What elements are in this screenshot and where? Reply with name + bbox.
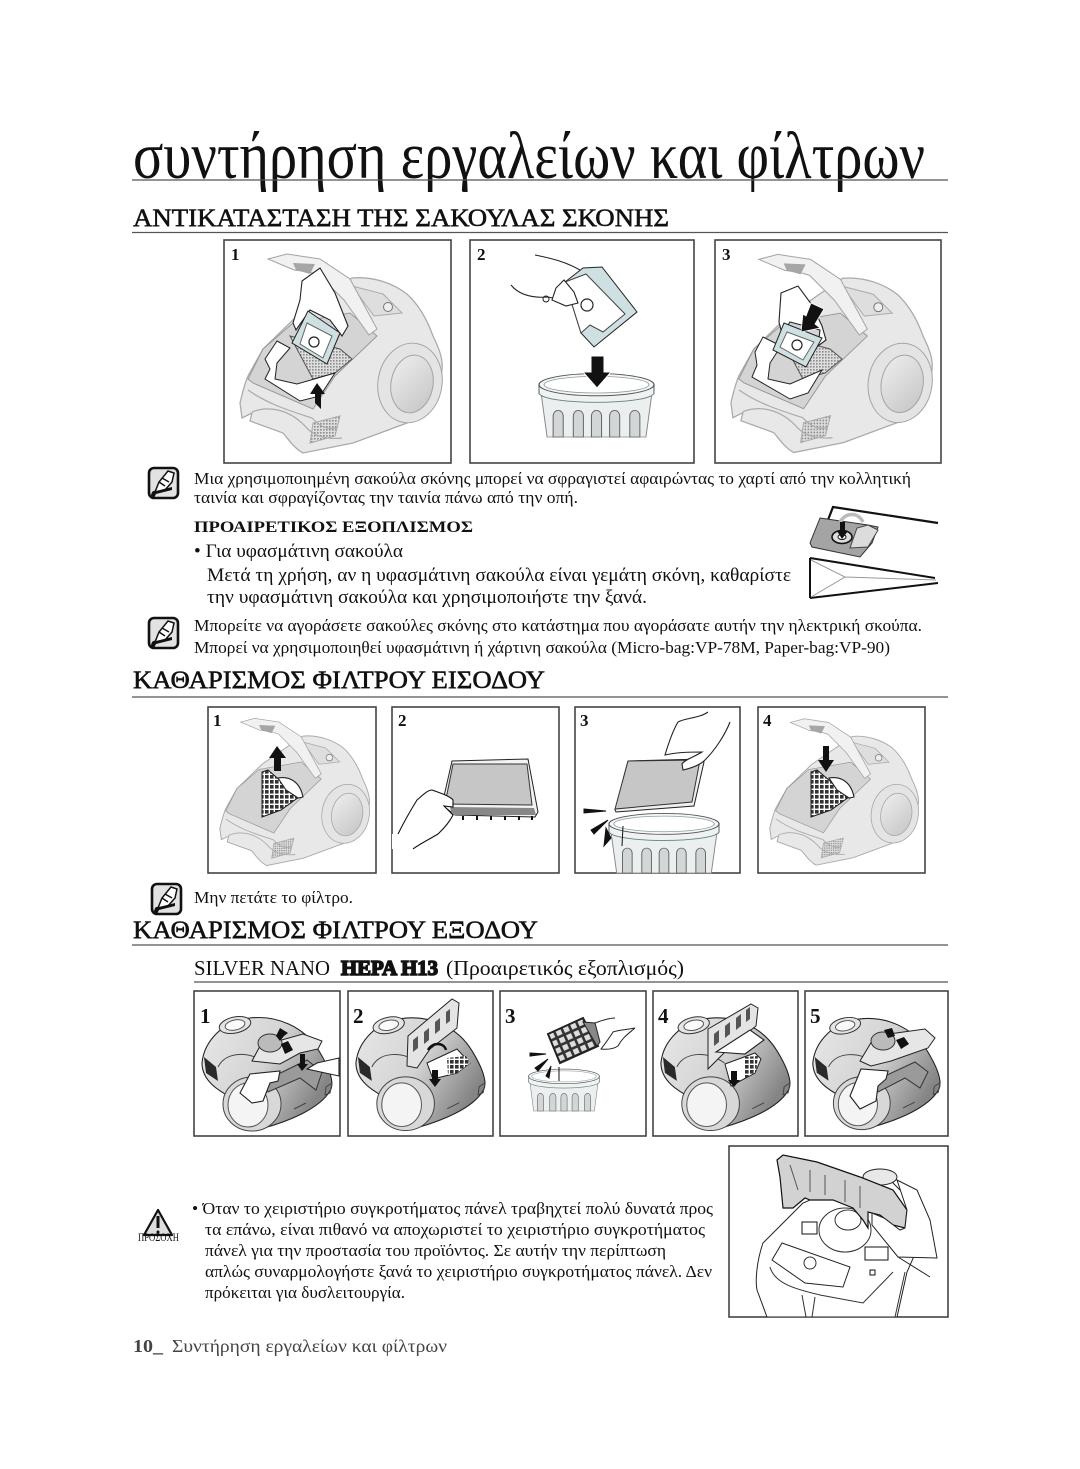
panel: inlet filter step 3: 3 <box>580 711 588 730</box>
panel: bag step 3: 3 <box>722 245 730 264</box>
text block: cloth bag: Μετά τη χρήση, αν η υφασμάτινη σακούλα είναι γεμάτη σκόνη, καθαρίστε <box>207 565 791 586</box>
panel: panel handle illustration <box>729 1146 948 1317</box>
panel: inlet filter step 4: 4 <box>763 711 772 730</box>
icon: caution <box>138 1210 179 1244</box>
icon: down arrow <box>583 356 611 388</box>
text block: do not discard the filter: Μην πετάτε το φίλτρο. <box>194 888 353 907</box>
panel: inlet filter step 1: 1 <box>213 711 222 730</box>
text block: caution: πρόκειται για δυσλειτουργία. <box>205 1283 405 1302</box>
panel: outlet filter step 4: 4 <box>658 1004 669 1028</box>
text block: note on buying bags: Μπορείτε να αγοράσετε σακούλες σκόνης στο κατάστημα που αγοράσατε αυτήν την ηλεκτρική σκούπα. <box>194 616 922 635</box>
text block: cloth bag: την υφασμάτινη σακούλα και χρησιμοποιήστε την ξανά. <box>207 587 647 608</box>
heading: outlet filter cleaning: ΚΑΘΑΡΙΣΜΟΣ ΦΙΛΤΡΟΥ ΕΞΟΔΟΥ <box>133 917 538 944</box>
heading: replacing the dust bag: ΑΝΤΙΚΑΤΑΣΤΑΣΗ ΤΗΣ ΣΑΚΟΥΛΑΣ ΣΚΟΝΗΣ <box>133 205 669 232</box>
panel: outlet filter step 3: 3 <box>505 1004 516 1028</box>
panel: bag step 3 <box>715 240 941 463</box>
subheading: silver nano hepa h13: (Προαιρετικός εξοπλισμός) <box>446 956 684 980</box>
panel: outlet filter step 2 <box>348 991 493 1136</box>
icon: note <box>152 884 181 914</box>
subheading: silver nano hepa h13: HEPA H13 <box>341 956 438 980</box>
panel: bag step 1 <box>224 240 451 463</box>
text block: note on sealing the bag: Μια χρησιμοποιημένη σακούλα σκόνης μπορεί να σφραγιστεί αφαιρώντας το χαρτί από την κολλητική <box>194 469 911 488</box>
icon: note <box>149 468 178 498</box>
subheading: silver nano hepa h13: SILVER NANO <box>194 956 330 980</box>
footer: 10_ <box>133 1336 164 1356</box>
panel: bag step 1: 1 <box>231 245 240 264</box>
text block: caution: απλώς συναρμολογήστε ξανά το χειριστήριο συγκροτήματος πάνελ. Δεν <box>205 1262 712 1281</box>
text block: note on buying bags <box>194 616 922 657</box>
panel: outlet filter step 5 <box>805 991 948 1136</box>
heading: optional equipment: ΠΡΟΑΙΡΕΤΙΚΟΣ ΕΞΟΠΛΙΣΜΟΣ <box>194 519 473 536</box>
panel: outlet filter step 2: 2 <box>353 1004 364 1028</box>
panel: outlet filter step 1: 1 <box>200 1004 210 1028</box>
text block: note on sealing the bag <box>194 469 911 507</box>
panel: outlet filter step 4 <box>653 991 798 1136</box>
panel: outlet filter step 5: 5 <box>810 1004 820 1028</box>
icon: bin <box>609 813 719 873</box>
text block: note on sealing the bag: ταινία και σφραγίζοντας την ταινία πάνω από την οπή. <box>194 488 578 507</box>
text block: cloth bag <box>194 541 791 608</box>
icon: bin <box>529 1069 599 1111</box>
panel: bag step 2 <box>470 240 694 463</box>
panel: bag step 2: 2 <box>477 245 486 264</box>
text block: cloth bag: • Για υφασμάτινη σακούλα <box>194 541 403 562</box>
panel: outlet filter step 1 <box>194 991 340 1136</box>
text block: caution: • Όταν το χειριστήριο συγκροτήματος πάνελ τραβηχτεί πολύ δυνατά προς <box>192 1199 713 1218</box>
text block: caution: πάνελ για την προστασία του προϊόντος. Σε αυτήν την περίπτωση <box>205 1241 666 1260</box>
panel: inlet filter step 2: 2 <box>398 711 406 730</box>
text block: caution <box>192 1199 713 1302</box>
text block: caution: τα επάνω, είναι πιθανό να αποχωριστεί το χειριστήριο συγκροτήματος <box>205 1220 705 1239</box>
panel: outlet filter step 3 <box>500 991 646 1136</box>
footer: Συντήρηση εργαλείων και φίλτρων <box>172 1336 447 1356</box>
subheading: silver nano hepa h13 <box>194 956 948 982</box>
panel: inlet filter step 2 <box>392 707 559 873</box>
icon: note <box>149 618 178 648</box>
panel: inlet filter step 1 <box>208 707 376 873</box>
panel: inlet filter step 3 <box>575 707 740 873</box>
title: συντήρηση εργαλείων και φίλτρων <box>133 119 925 193</box>
text block: note on buying bags: Μπορεί να χρησιμοποιηθεί υφασμάτινη ή χάρτινη σακούλα (Micro-bag:VP-78M, Paper-bag:VP-90) <box>194 638 890 657</box>
heading: inlet filter cleaning: ΚΑΘΑΡΙΣΜΟΣ ΦΙΛΤΡΟΥ ΕΙΣΟΔΟΥ <box>133 667 545 694</box>
illustration: cloth bag <box>810 507 938 598</box>
icon: bin <box>539 374 654 437</box>
panel: inlet filter step 4 <box>758 707 925 873</box>
icon: caution: ΠΡΟΣΟΧΗ <box>138 1230 179 1244</box>
